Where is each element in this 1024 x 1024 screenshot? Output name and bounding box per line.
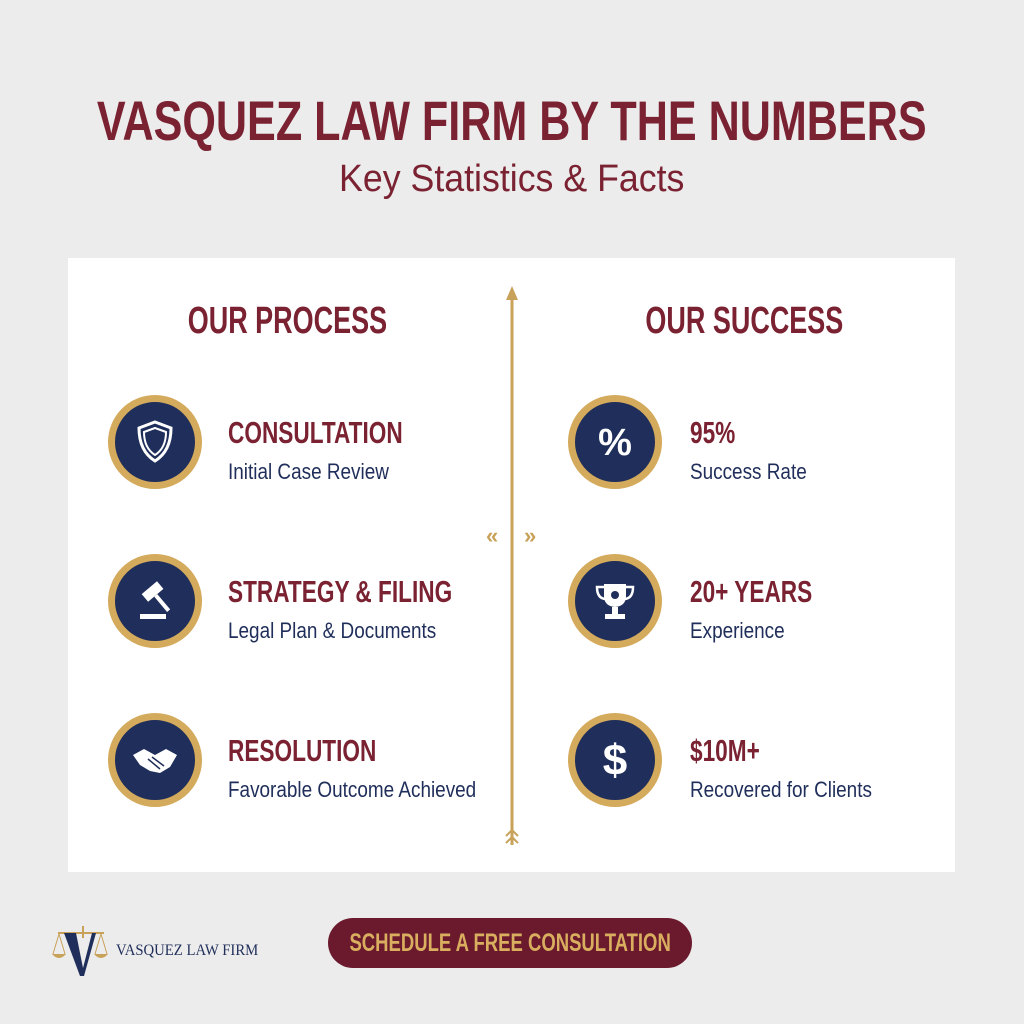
- stat: success rate: Success Rate: [690, 459, 807, 484]
- divider arrow: «: [486, 523, 498, 548]
- step: resolution: RESOLUTION: [228, 733, 376, 768]
- heading: our success: OUR SUCCESS: [645, 300, 843, 342]
- icon: trophy: [568, 554, 662, 648]
- stat: success rate: [568, 395, 807, 489]
- step: resolution: Favorable Outcome Achieved: [228, 777, 476, 802]
- stat: years: Experience: [690, 618, 785, 643]
- heading: our process: OUR PROCESS: [187, 300, 387, 342]
- firm name: VASQUEZ LAW FIRM: [116, 942, 258, 959]
- title: VASQUEZ LAW FIRM BY THE NUMBERS: [97, 89, 927, 152]
- stat: success rate: 95%: [690, 415, 735, 450]
- step: resolution: [108, 713, 476, 807]
- subtitle: Key Statistics & Facts: [339, 158, 685, 200]
- stat: recovered: Recovered for Clients: [690, 777, 872, 802]
- button: schedule: [328, 918, 692, 968]
- stat: recovered: $10M+: [690, 733, 760, 768]
- logo: [52, 926, 258, 976]
- step: consultation: CONSULTATION: [228, 415, 403, 450]
- icon: gavel: [108, 554, 202, 648]
- stat: years: [568, 554, 812, 648]
- icon: shield: [108, 395, 202, 489]
- icon: percent: [568, 395, 662, 489]
- step: consultation: Initial Case Review: [228, 459, 389, 484]
- icon: dollar: $: [603, 736, 627, 785]
- stat: recovered: [568, 713, 872, 807]
- icon: dollar: [568, 713, 662, 807]
- step: strategy: [108, 554, 452, 648]
- button: schedule: SCHEDULE A FREE CONSULTATION: [349, 929, 671, 957]
- step: consultation: [108, 395, 403, 489]
- icon: scales: [52, 926, 108, 976]
- panel: main: [68, 258, 955, 872]
- divider arrow: »: [524, 523, 536, 548]
- stat: years: 20+ YEARS: [690, 574, 812, 609]
- step: strategy: STRATEGY & FILING: [228, 574, 452, 609]
- icon: percent: %: [598, 422, 632, 464]
- icon: handshake: [108, 713, 202, 807]
- divider arrow: [486, 286, 536, 845]
- step: strategy: Legal Plan & Documents: [228, 618, 436, 643]
